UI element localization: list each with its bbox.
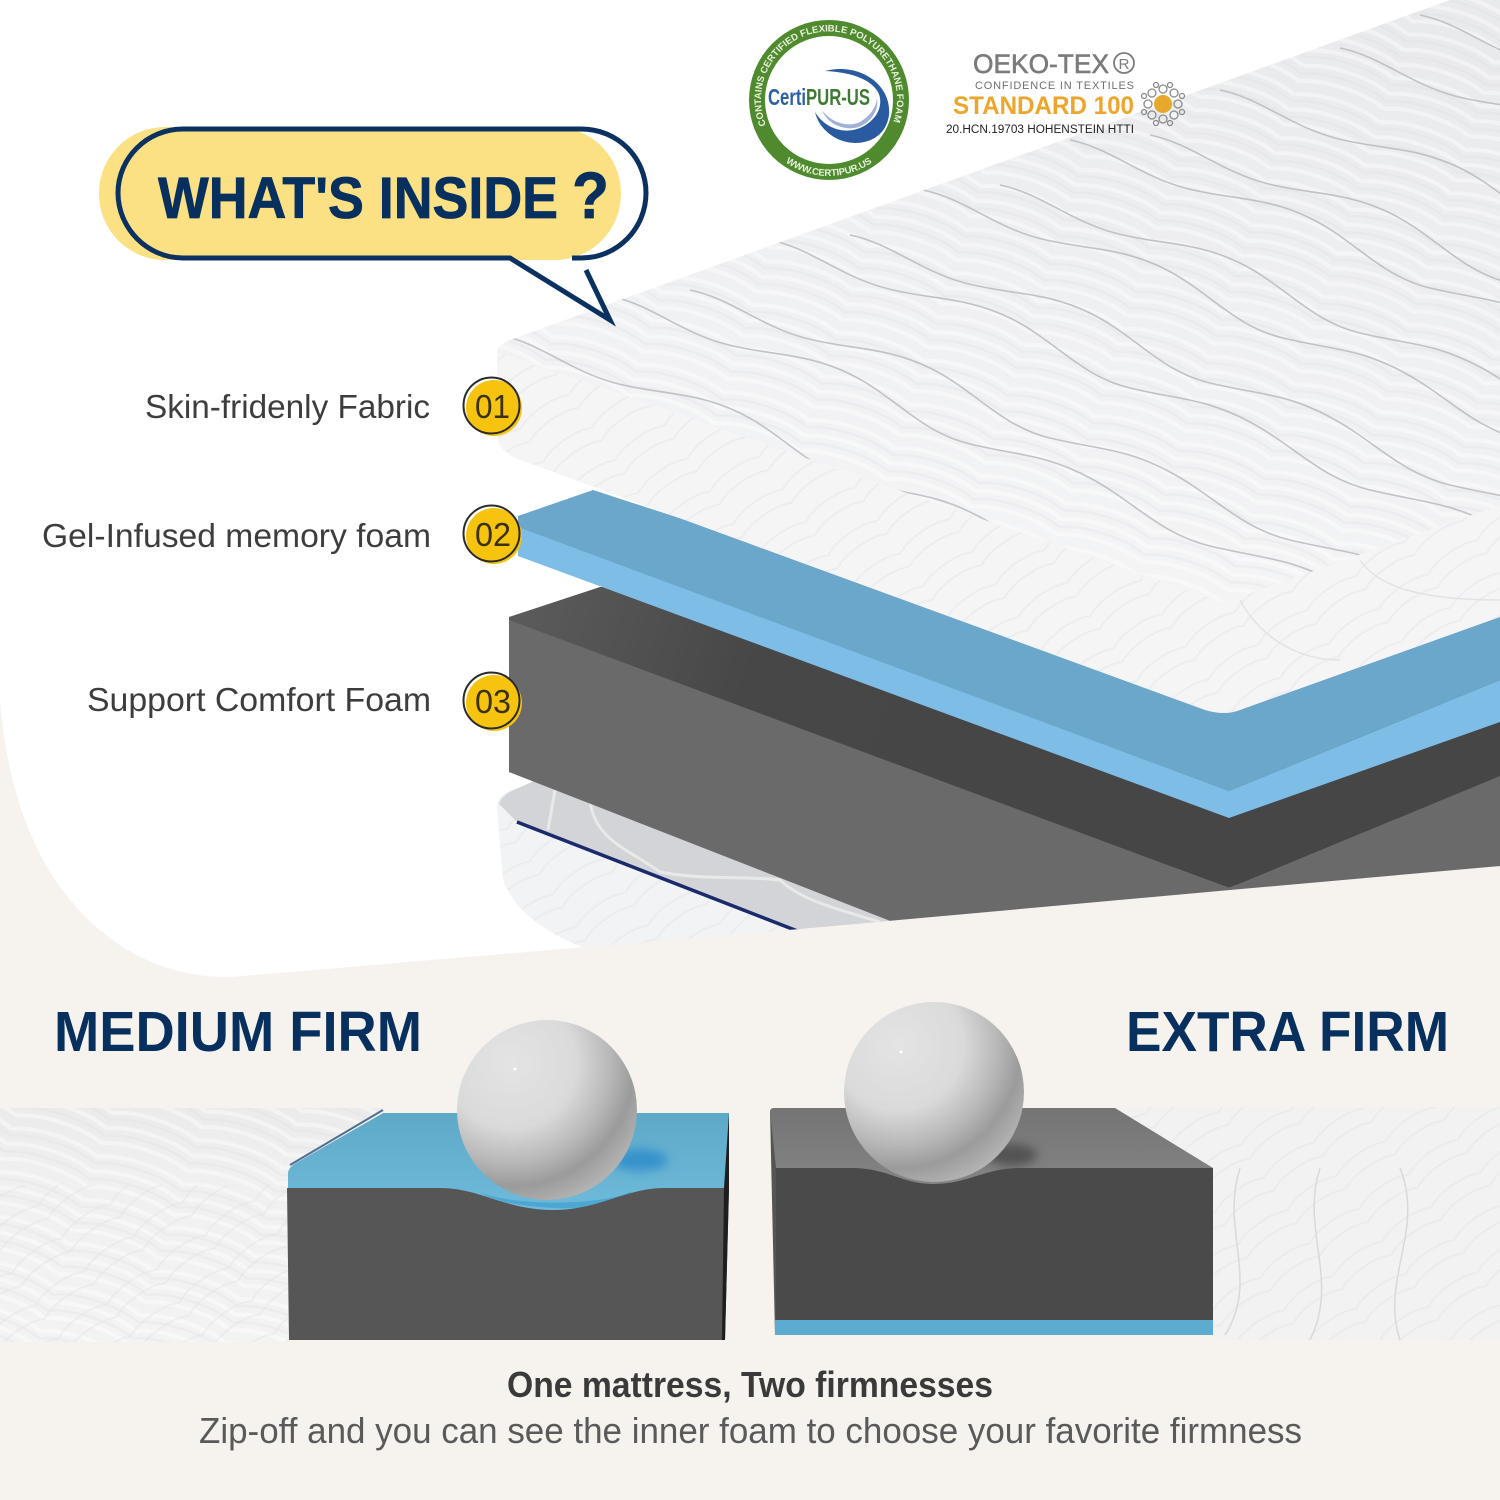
standard name: STANDARD 100 [953, 92, 1134, 120]
certification badge: CertiPUR-US: WWW.CERTIPUR.US [787, 156, 872, 176]
registered mark [1114, 53, 1134, 73]
caption [199, 1364, 1302, 1451]
zipper fold [290, 1110, 383, 1165]
dip shading [480, 1192, 640, 1208]
layer label 02: Gel-Infused memory foam [42, 517, 431, 554]
ring text top [761, 31, 897, 125]
yellow fill [99, 127, 621, 260]
layer label 02 [42, 506, 522, 564]
grey top surface [770, 1108, 1213, 1195]
medium firm mattress cross-section [0, 1020, 729, 1342]
heading: extra firm: EXTRA FIRM [1126, 1000, 1449, 1064]
quilting seams [512, 14, 1500, 572]
number badge 03 [464, 672, 522, 731]
number badge 01: 01 [475, 388, 510, 425]
blue gel memory foam layer [518, 490, 1500, 818]
navy outline with tail [118, 129, 646, 320]
caption body: Zip-off and you can see the inner foam to choose your favorite firmness [199, 1410, 1302, 1451]
fabric strip [0, 1108, 383, 1342]
ball [844, 1002, 1024, 1182]
certificate number: 20.HCN.19703 HOHENSTEIN HTTI [946, 124, 1134, 136]
layer label 03 [87, 672, 522, 731]
fabric strip [1115, 1107, 1500, 1340]
top mattress with quilted fabric [497, 0, 1500, 789]
certification badge: OEKO-TEX [946, 49, 1184, 136]
layer label 01: Skin-fridenly Fabric [145, 388, 430, 425]
blue gel top layer [288, 1113, 729, 1220]
number badge 02: 02 [475, 516, 511, 553]
tagline: CONFIDENCE IN TEXTILES [975, 80, 1134, 92]
caption title: One mattress, Two firmnesses [507, 1364, 993, 1405]
number badge 01 [464, 378, 522, 436]
block right edge [722, 1113, 729, 1340]
number badge 02 [464, 506, 522, 564]
dark support foam layer [509, 587, 1500, 930]
ball shadow [987, 1144, 1037, 1166]
number badge 03: 03 [475, 683, 511, 720]
grey foam front [287, 1188, 729, 1340]
brand name: CertiPUR-US [768, 84, 870, 110]
cream background shape [0, 700, 1500, 1500]
gel foam top surface [518, 490, 1500, 791]
ball [457, 1020, 637, 1200]
heading text: WHAT'S INSIDE [158, 166, 558, 231]
OEKO-TEX wordmark: OEKO-TEX [973, 49, 1109, 79]
certification badge: CertiPUR-US: CONTAINS CERTIFIED FLEXIBLE POLYURETHANE FOAM [754, 24, 904, 126]
gel foam front face [518, 527, 1500, 818]
blue swirl [815, 69, 889, 143]
extra firm mattress cross-section [770, 1002, 1500, 1340]
certification badge: CertiPUR-US [749, 20, 909, 180]
registered mark: R [1118, 56, 1130, 73]
left side face [770, 1110, 776, 1335]
ball shadow [612, 1149, 668, 1171]
blue gel bottom layer [775, 1320, 1213, 1335]
heading: medium firm: MEDIUM FIRM [54, 1000, 422, 1064]
foam front and side faces [509, 620, 1500, 930]
flower emblem [1142, 82, 1184, 126]
ring text bottom [780, 158, 878, 176]
layer label 01 [145, 378, 522, 436]
layer label 03: Support Comfort Foam [87, 681, 431, 718]
grey foam front [776, 1168, 1213, 1320]
question mark: ? [572, 158, 609, 232]
bottom mattress cover [497, 770, 920, 950]
foam top surface [509, 587, 1500, 888]
speech bubble: What's inside? [99, 127, 646, 320]
